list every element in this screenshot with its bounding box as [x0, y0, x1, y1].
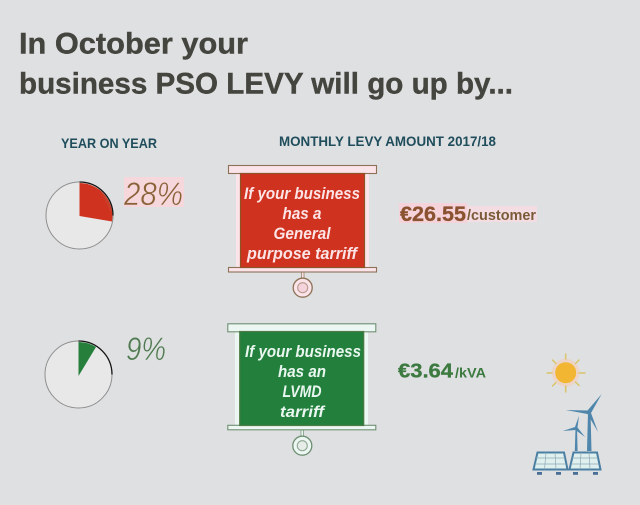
price: €26.55/customer: /customer: [467, 208, 536, 224]
price: €3.64/kVA: /kVA: [455, 366, 486, 380]
price: €26.55/customer: [399, 203, 537, 226]
screen text: [244, 184, 360, 263]
heading: monthly levy amount: MONTHLY LEVY AMOUNT 2017/18: [279, 133, 496, 149]
title: In October your: [19, 28, 248, 60]
screen text: tarriff: [280, 404, 326, 421]
screen text: has a: [282, 204, 322, 223]
price: €26.55/customer: €26.55: [400, 203, 466, 226]
screen text: If your business: [244, 184, 360, 203]
icon: sun: [547, 354, 585, 392]
green screen panel: [240, 332, 364, 426]
icon: solar panels: [534, 452, 600, 475]
pie chart: 28%: [46, 182, 113, 249]
projector screen frame: green: [228, 324, 376, 455]
screen text: has an: [278, 362, 326, 381]
board: LVMD tariff: [228, 324, 376, 455]
price: €3.64/kVA: €3.64: [398, 360, 454, 382]
screen text: [245, 342, 361, 421]
title: business PSO LEVY will go up by...: [19, 68, 513, 100]
red screen panel: [240, 174, 364, 268]
icon: wind turbines: [563, 394, 602, 451]
right solar panel: [570, 452, 600, 475]
large turbine: [587, 412, 592, 451]
title: [19, 28, 513, 100]
price: €3.64/kVA: [398, 360, 486, 382]
projector screen frame: red: [228, 166, 376, 297]
left solar panel: [534, 452, 568, 475]
pie chart: 9%: [45, 341, 112, 408]
heading: year on year: YEAR ON YEAR: [61, 135, 157, 151]
board: general purpose tariff: [228, 166, 376, 297]
label: 28%: 28%: [123, 176, 183, 212]
small turbine: [575, 428, 578, 451]
label: 9%: 9%: [126, 331, 166, 367]
screen text: If your business: [245, 342, 361, 361]
screen text: LVMD: [282, 382, 322, 401]
screen text: purpose tarriff: [246, 244, 359, 263]
screen text: General: [274, 224, 332, 243]
